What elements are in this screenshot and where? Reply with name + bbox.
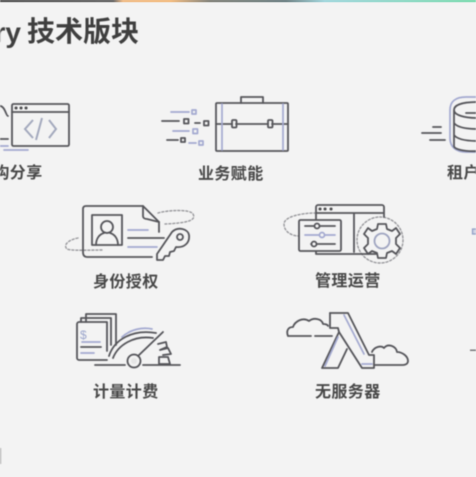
icon: clipped right-edge dash: [470, 350, 476, 351]
label: management operations: 管理运营: [315, 271, 381, 290]
top colour strip: [0, 0, 476, 2]
label: identity authorization: 身份授权: [93, 272, 159, 291]
label: serverless: 无服务器: [315, 382, 381, 401]
icon: business nodes and briefcase: [162, 97, 288, 151]
clipped bottom-left mark: [0, 448, 1, 464]
title: 技术版块: [27, 16, 139, 47]
label: metering and billing: 计量计费: [93, 383, 159, 401]
icon: clipped right-edge node: [472, 229, 476, 234]
icon: metering gauge and invoices: $: [80, 328, 87, 342]
icon: management window, sliders and gear: [284, 205, 403, 263]
icon: serverless lambda and clouds: [287, 313, 408, 368]
icon: code window: [0, 104, 69, 150]
icon: database: [422, 97, 476, 152]
label: business enablement: 业务赋能: [198, 164, 264, 183]
icon: metering gauge and invoices: [77, 314, 180, 368]
icon: identity card and key: [66, 206, 194, 260]
